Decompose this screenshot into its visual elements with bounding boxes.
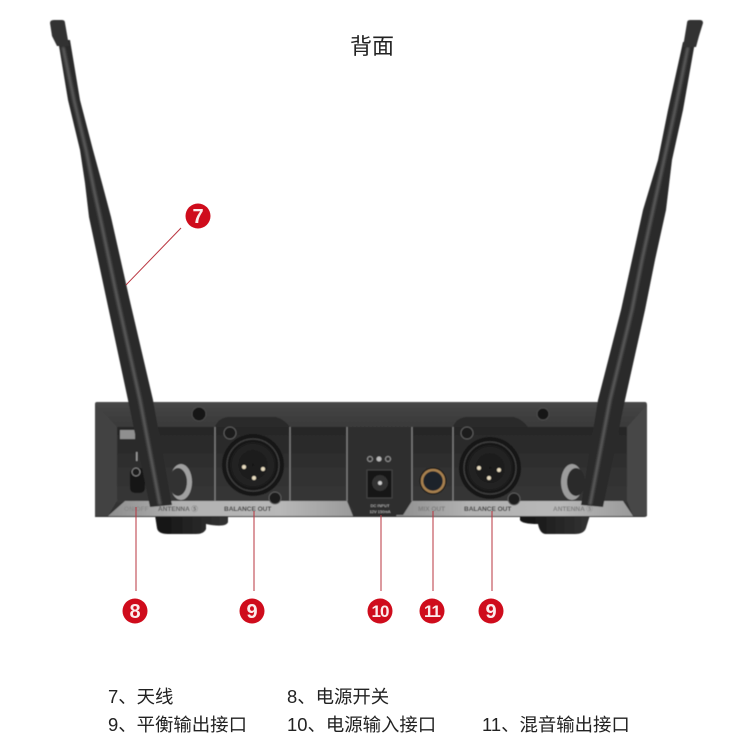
callout 9 left: 9 (246, 601, 258, 623)
callout 8 (122, 598, 148, 624)
legend item 8: 8、电源开关 (287, 686, 389, 707)
callout 8: 8 (129, 601, 141, 623)
legend item 7: 7、天线 (108, 686, 173, 707)
top screw right (537, 408, 549, 420)
left antenna (50, 20, 172, 507)
DC power socket: 12V 150mA (370, 509, 391, 514)
printed labels: BALANCE OUT (224, 506, 271, 513)
legend item 10: 10、电源输入接口 (287, 714, 436, 735)
label strip (108, 501, 353, 516)
logo mark (120, 430, 135, 439)
chassis bevel left (95, 404, 117, 516)
callout 10 (368, 598, 392, 624)
panel dividers (215, 427, 453, 501)
legend (108, 686, 630, 735)
right rubber foot (520, 515, 590, 534)
printed labels: MIX OUT (418, 506, 445, 513)
DC power socket: DC INPUT (371, 503, 390, 508)
top screw left (192, 407, 206, 421)
XLR connector right (459, 427, 521, 505)
callout 9 left (240, 598, 264, 624)
callout 9 right: 9 (485, 601, 497, 623)
printed labels (124, 504, 593, 513)
callout 10: 10 (372, 602, 389, 621)
connector recess raised edges (215, 417, 528, 427)
callout 11: 11 (424, 602, 441, 621)
printed labels: ANTENNA ⑤ (158, 504, 198, 513)
chassis (95, 402, 647, 517)
label strip right (396, 501, 633, 516)
mix out jack (420, 468, 446, 494)
DC power socket (367, 456, 392, 514)
callout 7 (186, 204, 210, 228)
printed labels: BALANCE OUT (464, 506, 511, 513)
XLR connector left (222, 427, 284, 504)
leader lines (126, 228, 492, 591)
callout 7: 7 (192, 206, 204, 228)
title: 背面 (350, 34, 394, 59)
right antenna connector (561, 464, 585, 500)
power section notch (347, 427, 412, 515)
left antenna connector (169, 464, 192, 500)
chassis bevel right (627, 405, 647, 516)
power switch (130, 452, 145, 493)
callout 11 (420, 598, 444, 624)
legend item 11: 11、混音输出接口 (482, 714, 630, 735)
device: receiver rear panel (50, 20, 703, 534)
callout 9 right (478, 598, 504, 624)
legend item 9: 9、平衡输出接口 (108, 714, 247, 735)
left rubber foot (155, 515, 228, 534)
right antenna (581, 20, 703, 507)
printed labels: ANTENNA ⑤ (553, 504, 593, 513)
printed labels: ON/OFF (124, 506, 149, 513)
recessed back panel (117, 427, 627, 502)
